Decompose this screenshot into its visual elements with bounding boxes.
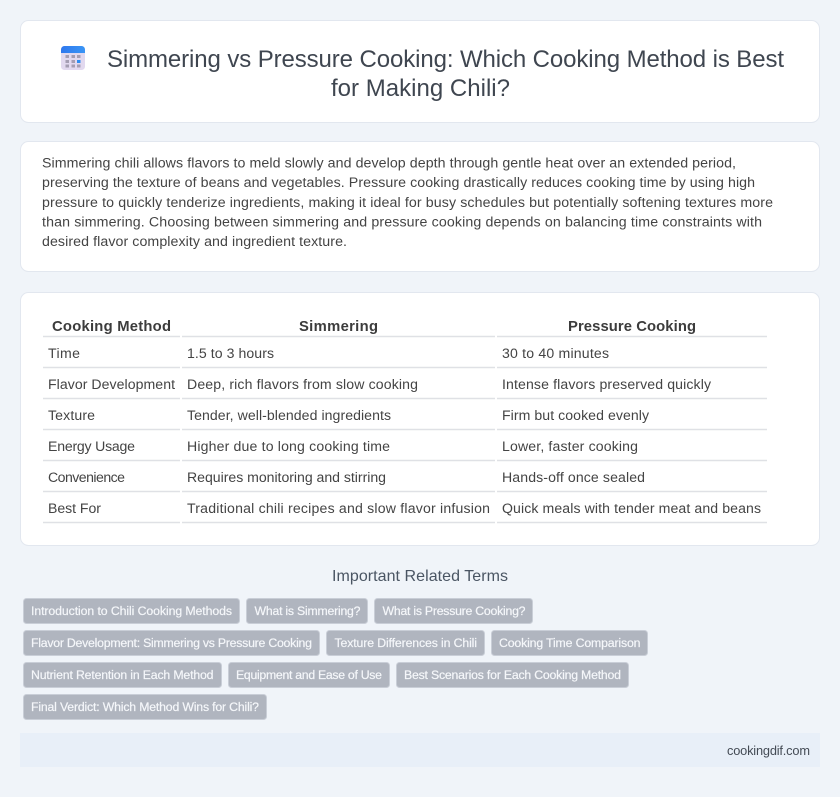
tag xyxy=(24,630,320,656)
tag: Cooking Time Comparison xyxy=(499,636,641,650)
tag xyxy=(326,630,484,656)
tag: Flavor Development: Simmering vs Pressure Cooking xyxy=(31,636,312,650)
tag group: related terms xyxy=(24,598,648,720)
panel: summary paragraph xyxy=(20,142,820,272)
table row: texture: Texture xyxy=(48,407,95,423)
tag xyxy=(228,662,390,688)
text block: summary: pressure to quickly tenderize ingredients, making it ideal for busy schedules but potentially softening textures more xyxy=(42,195,773,211)
table row: energy usage xyxy=(48,438,638,454)
tag: Introduction to Chili Cooking Methods xyxy=(31,604,232,618)
text block: summary xyxy=(42,156,773,250)
tag: Texture Differences in Chili xyxy=(334,636,477,650)
table row: best for: Best For xyxy=(48,500,101,516)
table row: best for: Traditional chili recipes and slow flavor infusion xyxy=(187,500,490,516)
tag: Best Scenarios for Each Cooking Method xyxy=(404,668,621,682)
tag xyxy=(492,630,648,656)
table row: flavor development: Flavor Development xyxy=(48,376,175,392)
table row: time: Time xyxy=(48,345,80,361)
table row: texture: Tender, well-blended ingredients xyxy=(187,407,391,423)
footer credit: cookingdif.com xyxy=(727,743,810,758)
table row: texture xyxy=(48,407,650,423)
table row: time: 1.5 to 3 hours xyxy=(187,345,274,361)
text block: summary: Simmering chili allows flavors to meld slowly and develop depth through gentle heat over an extended period, xyxy=(42,156,736,172)
table row: texture: Firm but cooked evenly xyxy=(502,407,650,423)
title: Simmering vs Pressure Cooking: Which Cooking Method is Best xyxy=(107,46,784,73)
tag xyxy=(24,662,222,688)
table header: Simmering xyxy=(299,319,378,335)
footer xyxy=(20,733,820,767)
tag: What is Pressure Cooking? xyxy=(382,604,526,618)
table row: energy usage: Lower, faster cooking xyxy=(502,438,638,454)
icon: calendar xyxy=(61,46,85,70)
table row: flavor development: Intense flavors preserved quickly xyxy=(502,376,712,392)
text block: summary: than simmering. Choosing between simmering and pressure cooking depends on balancing time constraints with xyxy=(42,214,762,230)
text block: summary: preserving the texture of beans and vegetables. Pressure cooking drastically reduces cooking time by using high xyxy=(42,175,755,191)
table row: time xyxy=(48,345,609,361)
table row: flavor development: Deep, rich flavors from slow cooking xyxy=(187,376,418,392)
table row: flavor development xyxy=(48,376,712,392)
tag: Final Verdict: Which Method Wins for Chili? xyxy=(31,700,259,714)
table row: energy usage: Higher due to long cooking time xyxy=(187,438,390,454)
table row: best for: Quick meals with tender meat and beans xyxy=(502,500,761,516)
heading: important related terms: Important Related Terms xyxy=(332,568,508,585)
table row: convenience: Hands-off once sealed xyxy=(502,469,645,485)
tag xyxy=(246,598,368,624)
tag xyxy=(396,662,628,688)
tag: What is Simmering? xyxy=(254,604,361,618)
text block: summary: desired flavor complexity and ingredient texture. xyxy=(42,234,347,250)
table row: energy usage: Energy Usage xyxy=(48,438,135,454)
panel: title card xyxy=(20,20,820,122)
tag xyxy=(24,694,266,720)
table row: convenience: Convenience xyxy=(48,469,125,485)
table row: time: 30 to 40 minutes xyxy=(502,345,609,361)
table row: best for xyxy=(48,500,761,516)
title xyxy=(107,46,784,102)
panel: comparison table xyxy=(20,292,820,546)
table row: convenience: Requires monitoring and stirring xyxy=(187,469,386,485)
tag xyxy=(24,598,240,624)
table header: Pressure Cooking xyxy=(568,319,696,335)
table header xyxy=(52,319,696,335)
tag xyxy=(374,598,532,624)
tag: Nutrient Retention in Each Method xyxy=(31,668,214,682)
table row: convenience xyxy=(48,469,645,485)
table header: Cooking Method xyxy=(52,319,171,335)
tag: Equipment and Ease of Use xyxy=(236,668,382,682)
title: for Making Chili? xyxy=(331,75,510,102)
